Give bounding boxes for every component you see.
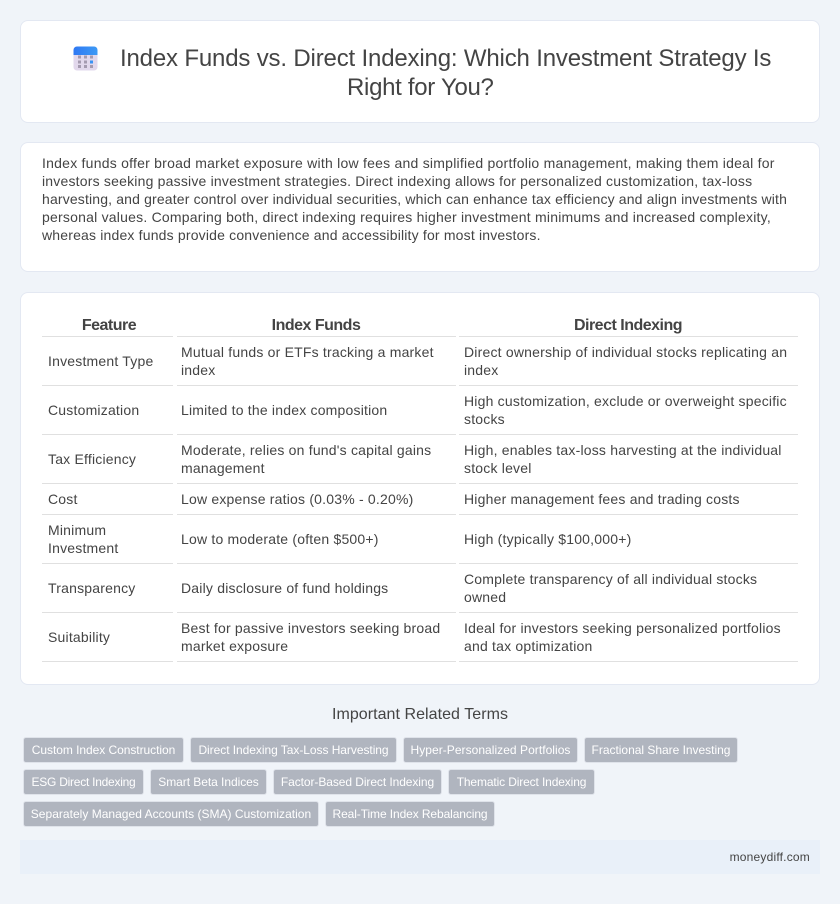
row: suitability: Best for passive investors seeking broad	[181, 620, 440, 636]
intro text: whereas index funds provide convenience and accessibility for most investors.	[42, 227, 541, 243]
related terms tags: Custom Index Construction	[32, 743, 175, 757]
row: cost: Higher management fees and trading costs	[464, 491, 740, 507]
row: investment type: Investment Type	[48, 353, 153, 369]
row: investment type: Direct ownership of individual stocks replicating an	[464, 344, 787, 360]
row: investment type	[48, 344, 787, 378]
row: investment type: Mutual funds or ETFs tracking a market	[181, 344, 434, 360]
row: minimum investment: Low to moderate (often $500+)	[181, 531, 379, 547]
row: suitability: and tax optimization	[464, 638, 593, 654]
row: tax efficiency: Moderate, relies on fund's capital gains	[181, 442, 431, 458]
panel: title card	[20, 20, 820, 123]
title: Index Funds vs. Direct Indexing: Which Investment Strategy Is	[120, 45, 771, 72]
row: investment type: index	[464, 362, 498, 378]
row: transparency: Complete transparency of all individual stocks	[464, 571, 757, 587]
row: suitability: market exposure	[181, 638, 288, 654]
row: minimum investment: Minimum	[48, 522, 106, 538]
row: cost: Cost	[48, 491, 78, 507]
heading: important related terms: Important Related Terms	[332, 706, 508, 723]
related terms tags: ESG Direct Indexing	[32, 775, 135, 789]
related terms tags: Thematic Direct Indexing	[457, 775, 586, 789]
related terms tags	[23, 737, 738, 827]
related terms tags: Hyper-Personalized Portfolios	[411, 743, 570, 757]
row: tax efficiency	[48, 442, 782, 476]
row: transparency	[48, 571, 757, 605]
related terms tags: Smart Beta Indices	[158, 775, 259, 789]
title	[120, 45, 771, 101]
intro text: personal values. Comparing both, direct indexing requires higher investment minimums and increased complexity,	[42, 209, 771, 225]
related terms tags: Factor-Based Direct Indexing	[281, 775, 434, 789]
row: suitability: Suitability	[48, 629, 110, 645]
row: cost	[48, 491, 740, 507]
row: minimum investment: High (typically $100,000+)	[464, 531, 631, 547]
panel: comparison table	[20, 292, 820, 685]
row: tax efficiency: Tax Efficiency	[48, 451, 136, 467]
table header: Feature	[82, 317, 136, 334]
row: minimum investment: Investment	[48, 540, 118, 556]
row: tax efficiency: management	[181, 460, 265, 476]
row: transparency: owned	[464, 589, 506, 605]
row: customization: Customization	[48, 402, 139, 418]
row: minimum investment	[48, 522, 631, 556]
row: transparency: Daily disclosure of fund holdings	[181, 580, 388, 596]
row: suitability	[48, 620, 781, 654]
footer source: moneydiff.com	[730, 850, 810, 864]
row: customization: Limited to the index composition	[181, 402, 387, 418]
row dividers	[42, 336, 798, 662]
intro text: harvesting, and greater control over individual securities, which can enhance tax efficiency and align investments with	[42, 191, 787, 207]
intro text	[42, 155, 787, 243]
row: customization: High customization, exclude or overweight specific	[464, 393, 787, 409]
intro text: Index funds offer broad market exposure with low fees and simplified portfolio management, making them ideal for	[42, 155, 775, 171]
row: cost: Low expense ratios (0.03% - 0.20%)	[181, 491, 413, 507]
panel: introduction	[20, 142, 820, 272]
intro text: investors seeking passive investment strategies. Direct indexing allows for personalized customization, tax-loss	[42, 173, 752, 189]
row: tax efficiency: High, enables tax-loss harvesting at the individual	[464, 442, 782, 458]
row: tax efficiency: stock level	[464, 460, 532, 476]
row: customization	[48, 393, 787, 427]
related terms tags: Real-Time Index Rebalancing	[333, 807, 487, 821]
title: Right for You?	[347, 74, 494, 101]
row: suitability: Ideal for investors seeking personalized portfolios	[464, 620, 781, 636]
table header: Direct Indexing	[574, 317, 682, 334]
table header: Index Funds	[272, 317, 360, 334]
related terms tags: Direct Indexing Tax-Loss Harvesting	[198, 743, 389, 757]
icon: calendar	[74, 46, 98, 70]
footer bar	[20, 840, 820, 874]
row: investment type: index	[181, 362, 215, 378]
table header	[82, 317, 682, 334]
related terms tags: Fractional Share Investing	[592, 743, 730, 757]
row: customization: stocks	[464, 411, 505, 427]
row: transparency: Transparency	[48, 580, 135, 596]
related terms tags: Separately Managed Accounts (SMA) Customization	[31, 807, 311, 821]
